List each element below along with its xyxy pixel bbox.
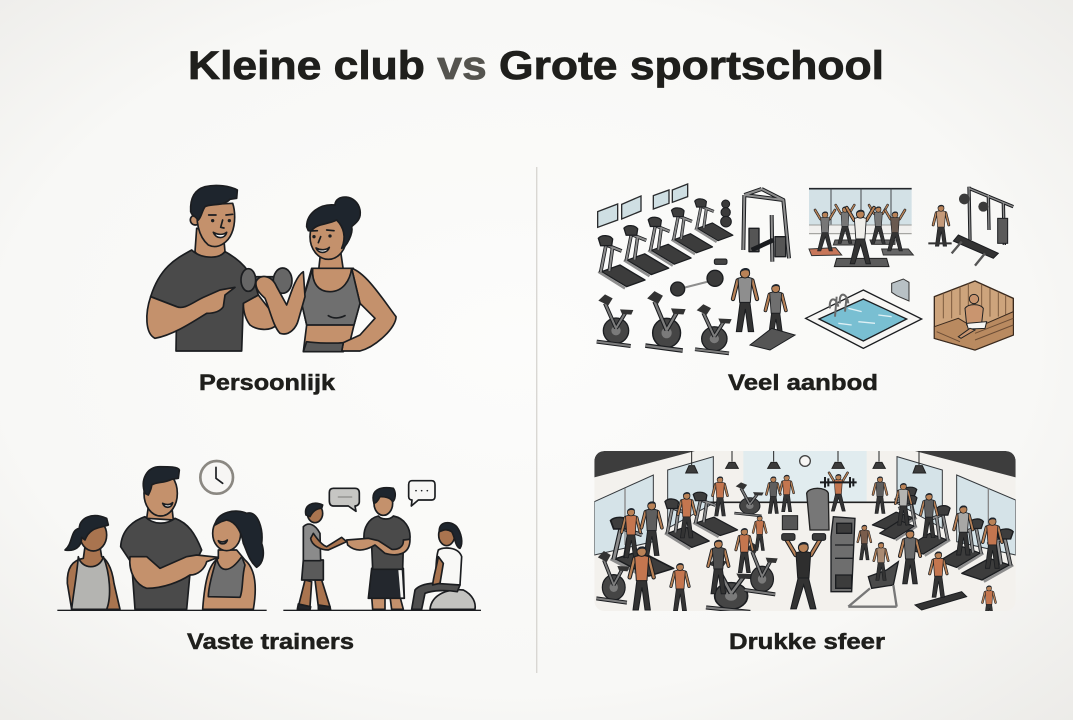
exercise bikes — [597, 291, 732, 353]
wall mirrors — [598, 184, 688, 227]
panel: vaste trainers — [57, 461, 481, 654]
clock — [200, 461, 233, 494]
illustration: trainer and client with dumbbell — [147, 185, 396, 352]
speech bubble dots — [409, 481, 435, 506]
panel: persoonlijk — [147, 185, 396, 395]
speech bubble grey — [329, 488, 359, 511]
label: persoonlijk: Persoonlijk — [199, 370, 336, 395]
left visitor shaking hands — [297, 503, 347, 610]
illustration: trainer with clients — [57, 461, 481, 611]
barbell — [671, 270, 723, 296]
gym crowd — [622, 473, 1002, 620]
treadmills — [598, 199, 733, 288]
sauna — [934, 281, 1013, 350]
wall clock — [800, 456, 810, 466]
dumbbell — [241, 268, 292, 293]
ceiling lamps — [686, 451, 926, 473]
panel: veel aanbod — [597, 184, 1013, 395]
panel: drukke sfeer — [594, 451, 1016, 654]
raised dumbbells — [782, 477, 857, 540]
room background — [594, 451, 1016, 611]
dumbbell small — [714, 259, 727, 264]
ground line right — [283, 610, 481, 611]
pool — [806, 279, 922, 348]
treadmills and machines — [596, 482, 1013, 612]
left client — [65, 516, 120, 609]
weight plates — [721, 200, 731, 227]
label: veel aanbod: Veel aanbod — [728, 370, 878, 395]
power rack with trainer — [928, 187, 1013, 266]
label: vaste trainers: Vaste trainers — [187, 629, 354, 654]
woman — [256, 197, 396, 352]
illustration: crowded gym — [594, 451, 1016, 620]
standing trainer and runner — [733, 268, 795, 350]
right trainer — [347, 488, 410, 609]
ground line left — [57, 610, 267, 611]
divider between small club and big gym — [536, 167, 537, 673]
title: Kleine club vs Grote sportschool — [188, 44, 884, 88]
seated client on ball — [412, 523, 475, 609]
label: drukke sfeer: Drukke sfeer — [729, 629, 885, 654]
right client — [203, 511, 263, 609]
man — [147, 185, 277, 351]
group class — [809, 188, 913, 267]
cable machine — [743, 189, 789, 262]
center trainer — [121, 467, 218, 609]
illustration: gym facilities — [597, 184, 1013, 353]
